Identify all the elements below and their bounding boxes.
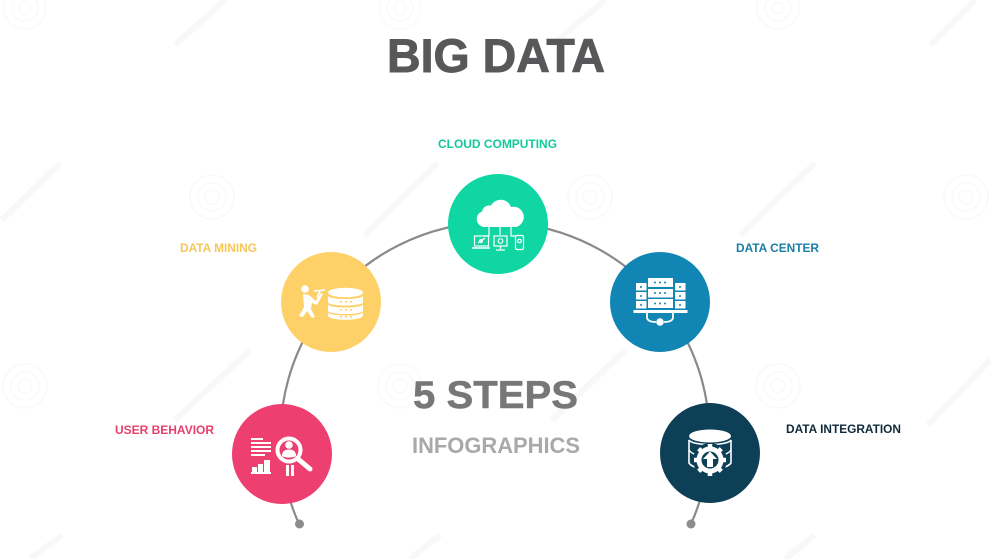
label: cloud computing: CLOUD COMPUTING	[438, 137, 557, 151]
center subheading: infographics: INFOGRAPHICS	[412, 433, 580, 458]
label: data mining: DATA MINING	[180, 241, 257, 255]
label: data center: DATA CENTER	[736, 241, 819, 255]
icon: database with gear and upload arrow	[689, 430, 731, 477]
label: user behavior: USER BEHAVIOR	[115, 423, 214, 437]
icon: report and magnifier over person	[251, 438, 310, 476]
step: data center	[610, 241, 819, 352]
title: BIG DATA	[387, 30, 605, 83]
step: data integration	[660, 403, 901, 503]
circle: data mining	[281, 252, 381, 352]
center heading: 5 steps: 5 STEPS	[413, 374, 578, 417]
step: user behavior	[115, 404, 332, 504]
circle: data integration	[660, 403, 760, 503]
step: data mining	[180, 241, 381, 352]
icon: miner with pickaxe and database	[299, 285, 363, 320]
icon: server racks on network platform	[634, 278, 688, 326]
step: cloud computing	[438, 137, 557, 274]
circle: user behavior	[232, 404, 332, 504]
circle: cloud computing	[448, 174, 548, 274]
circle: data center	[610, 252, 710, 352]
label: data integration: DATA INTEGRATION	[786, 422, 901, 436]
arc connector with end dots	[281, 222, 710, 528]
icon: cloud connected to devices	[472, 200, 524, 250]
